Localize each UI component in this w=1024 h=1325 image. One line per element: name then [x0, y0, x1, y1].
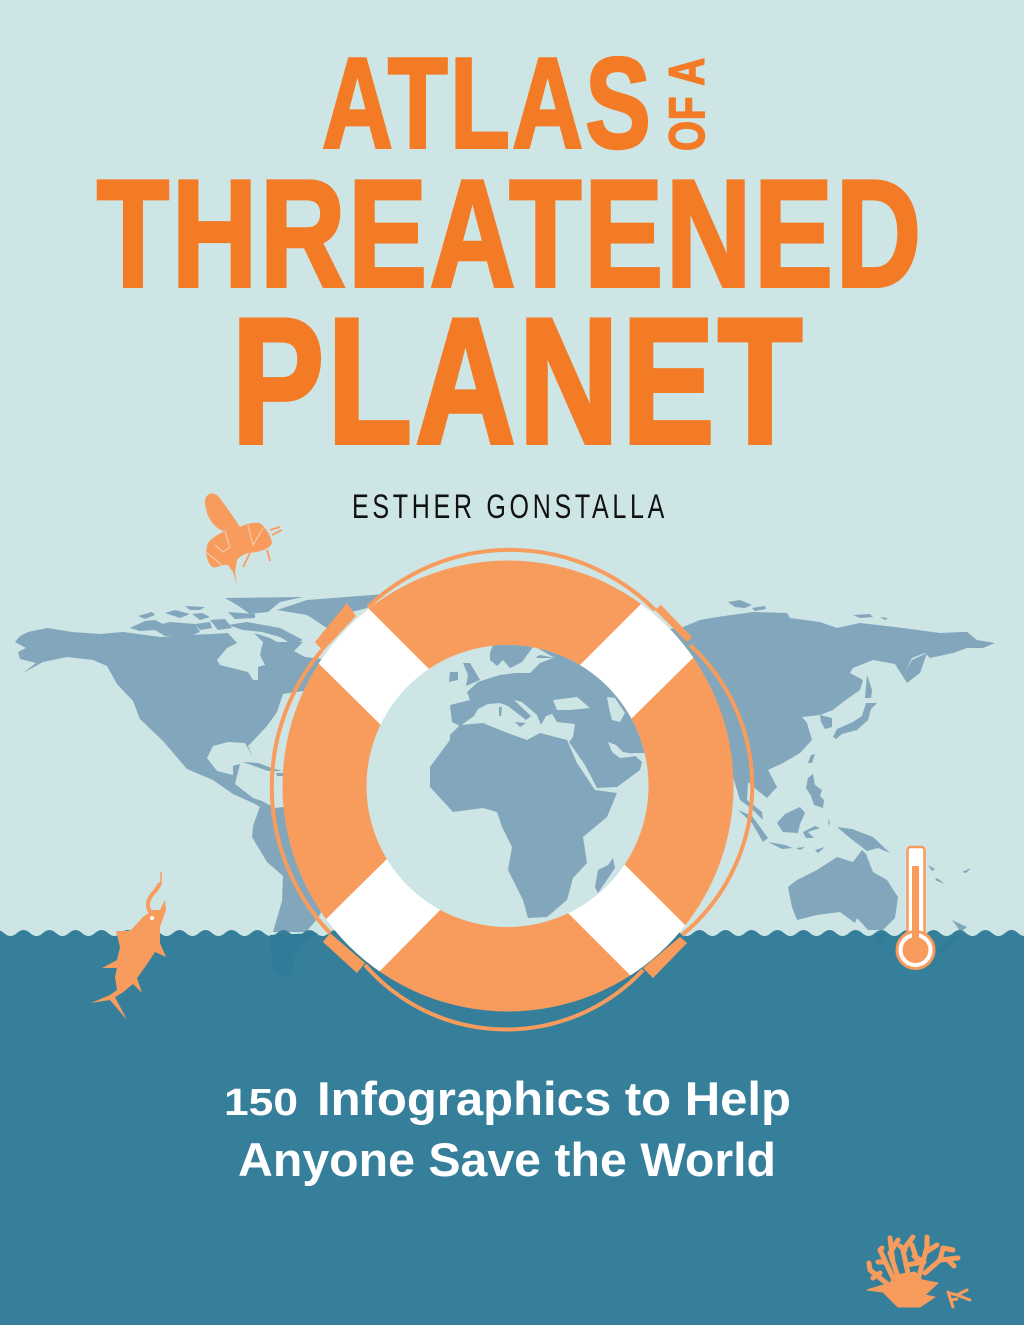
- thermometer tube: [908, 847, 924, 942]
- white bands: [309, 595, 703, 984]
- coral base: [867, 1272, 938, 1307]
- life ring: [272, 550, 752, 1029]
- Madagascar: [595, 858, 615, 893]
- bee antennae and legs: [243, 527, 282, 567]
- bee wing: [205, 493, 240, 531]
- ring body: [282, 560, 734, 1012]
- New Zealand and Pacific islands: [928, 865, 971, 933]
- Sardinia, Sicily and Cyprus: [499, 707, 526, 727]
- thermometer: [897, 847, 934, 968]
- title: Atlas of a Threatened Planet: [97, 32, 924, 480]
- Cuba and Hispaniola: [243, 762, 284, 776]
- subtitle: [224, 1072, 791, 1186]
- Arctic Russian islands: [728, 600, 888, 620]
- Europe and Middle East: [450, 648, 644, 788]
- subtitle line two: Anyone Save the World: [238, 1133, 776, 1186]
- rope: [272, 550, 752, 1029]
- Scandinavia: [490, 645, 533, 668]
- subtitle line one: Infographics to Help: [317, 1072, 791, 1125]
- hook: [148, 883, 160, 914]
- ocean: [0, 930, 1024, 1325]
- bee: [205, 493, 282, 584]
- bee stripes: [207, 525, 263, 565]
- thermometer bulb: [897, 932, 934, 968]
- straps: [315, 603, 692, 978]
- title line: PLANET: PLANET: [232, 282, 806, 480]
- South America: [252, 800, 340, 932]
- title: OF A: OF A: [659, 57, 715, 151]
- bee body: [206, 523, 272, 584]
- Taiwan and Philippines: [806, 754, 824, 808]
- fish body: [91, 900, 166, 1020]
- submerged land shadows: [270, 933, 960, 975]
- subtitle line one: 150: [224, 1082, 298, 1124]
- title line: ATLAS: ATLAS: [322, 32, 653, 176]
- inner globe: [366, 645, 648, 927]
- coral branches: [869, 1237, 958, 1286]
- world map: [15, 594, 995, 933]
- coral: [867, 1237, 970, 1307]
- North America: [15, 628, 340, 808]
- Baltic, Black and Caspian seas: [516, 656, 636, 758]
- Greenland and Ellesmere: [225, 594, 385, 628]
- globe land: [430, 645, 644, 918]
- Britain and Ireland: [449, 663, 480, 686]
- Japan and Korea: [820, 675, 877, 739]
- Australia: [788, 850, 898, 930]
- thermometer mercury: [912, 866, 919, 946]
- fish eye: [150, 916, 154, 920]
- Eurasia: [600, 612, 995, 820]
- fish on hook: [91, 872, 166, 1020]
- Indonesia: [738, 807, 890, 853]
- author name: ESTHER GONSTALLA: [352, 488, 668, 526]
- Africa: [430, 723, 617, 918]
- small coral fragment: [948, 1290, 970, 1307]
- Kamchatka: [905, 653, 927, 683]
- Baffin and Arctic islands: [130, 606, 303, 645]
